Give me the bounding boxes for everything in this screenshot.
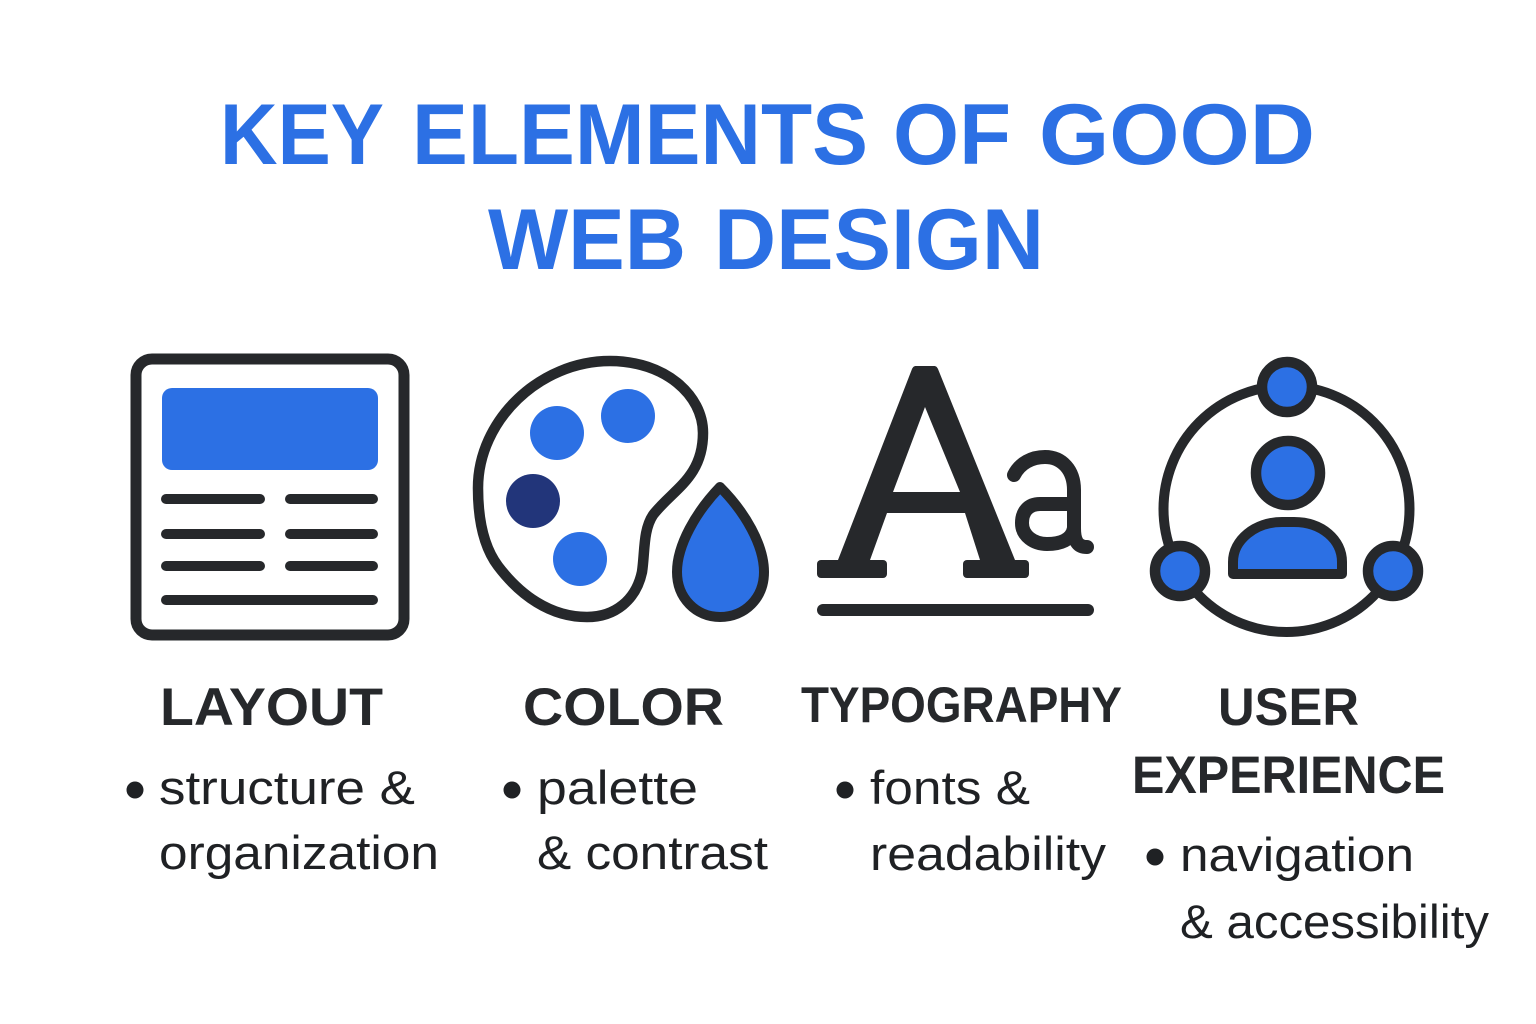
title: WEB <box>488 192 686 288</box>
text: typography description: readability <box>870 827 1107 880</box>
text: typography description <box>836 761 1107 880</box>
icon: typeface Aa <box>817 366 1094 616</box>
text: color description <box>504 761 768 879</box>
title: DESIGN <box>714 192 1044 288</box>
text: user experience description: & accessibility <box>1180 895 1490 948</box>
text: user experience description <box>1146 828 1490 948</box>
icon: palette and drop <box>478 361 764 617</box>
title <box>220 87 1315 288</box>
text: typography description: fonts & <box>870 761 1030 814</box>
text: color description: & contrast <box>537 826 768 879</box>
heading: user experience: EXPERIENCE <box>1132 746 1445 805</box>
title: GOOD <box>1039 87 1315 183</box>
panel: typography <box>801 366 1122 880</box>
icon: page layout <box>136 359 404 635</box>
title: ELEMENTS <box>412 87 868 183</box>
text: user experience description: navigation <box>1180 828 1414 881</box>
heading: color: COLOR <box>523 678 724 737</box>
panel: user experience <box>1132 362 1490 948</box>
title: KEY <box>220 87 384 183</box>
heading: layout: LAYOUT <box>160 678 383 737</box>
text: layout description: organization <box>159 826 439 879</box>
text: color description: palette <box>537 761 698 814</box>
panel: color <box>478 361 768 879</box>
heading: user experience <box>1132 678 1445 805</box>
panel: layout <box>126 359 439 879</box>
text: layout description <box>126 761 439 879</box>
text: layout description: structure & <box>159 761 415 814</box>
heading: user experience: USER <box>1218 678 1359 737</box>
icon: user network <box>1155 362 1418 632</box>
title: OF <box>893 87 1011 183</box>
heading: typography: TYPOGRAPHY <box>801 677 1122 733</box>
